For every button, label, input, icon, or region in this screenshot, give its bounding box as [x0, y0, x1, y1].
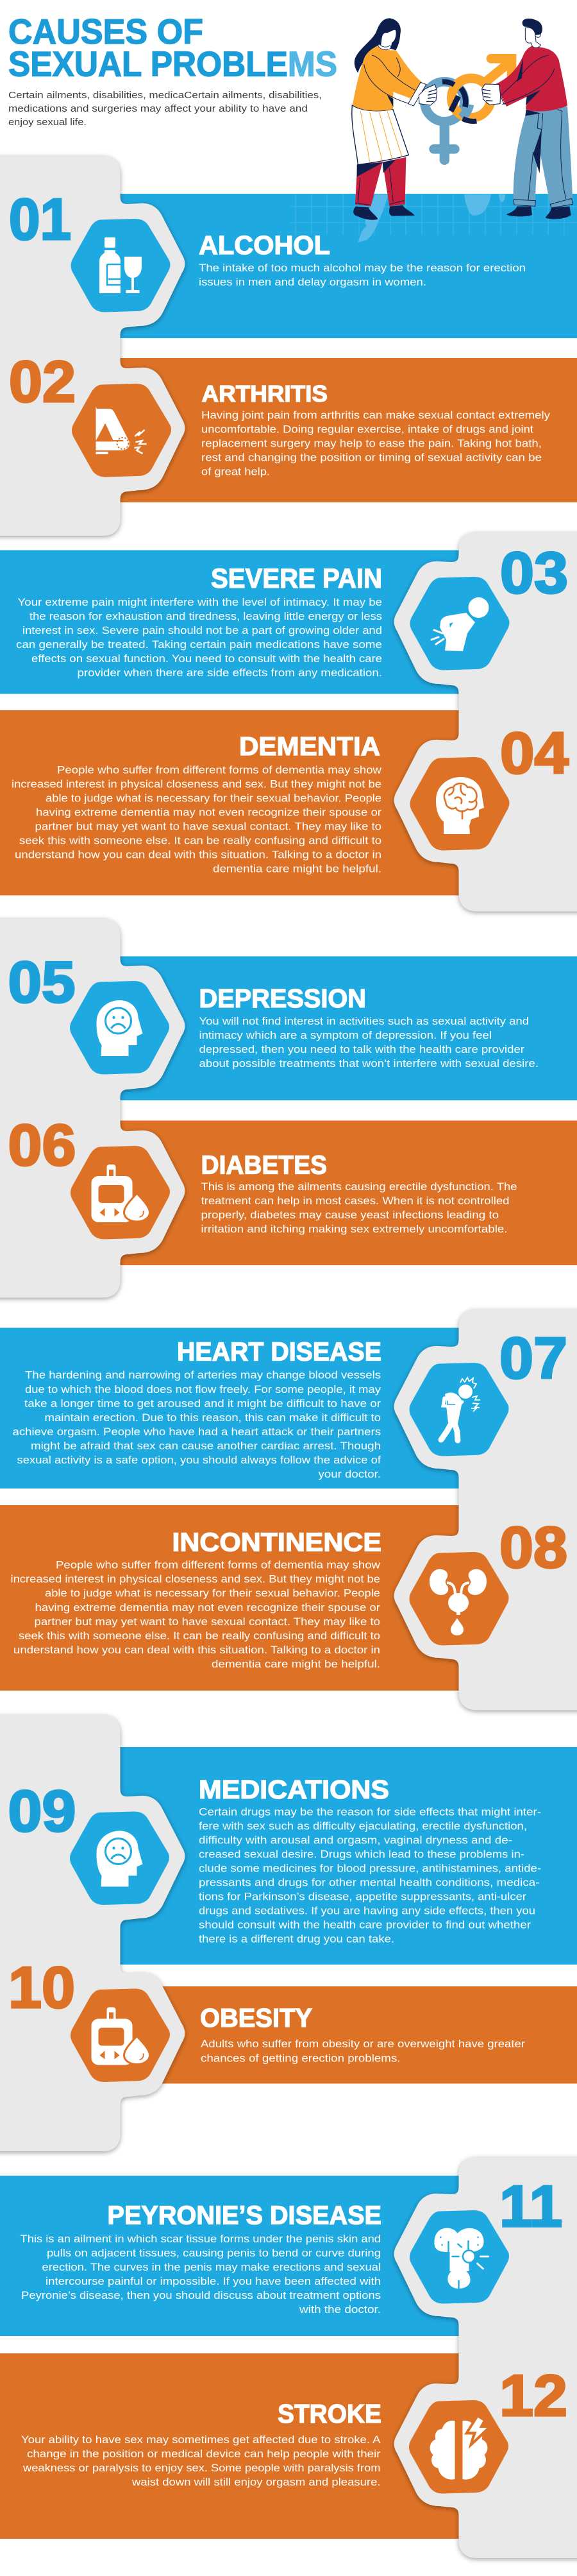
body text: Your extreme pain might interfere with the level of intimacy. It may be: [18, 597, 382, 608]
grey tab: sections 07-08: [394, 1309, 577, 1710]
body text: increased interest in physical closeness and sex. But they might not be: [10, 1573, 380, 1585]
icon: sad head: [70, 1811, 169, 1905]
panel: 08 incontinence: [10, 1515, 567, 1670]
heading: STROKE: [278, 2399, 381, 2428]
panel: 02 arthritis: [9, 350, 551, 477]
body text: maintain erection. Due to this reason, this can make it difficult to: [45, 1412, 381, 1424]
body text: partner but may yet want to have sexual contact. They may like to: [35, 1616, 380, 1628]
body text: able to judge what is necessary for their sexual behavior. People: [45, 1587, 380, 1599]
illustration: woman and man holding gender symbols: [352, 18, 573, 220]
number 11: 11: [499, 2174, 562, 2239]
icon: painful elbow joint: [72, 384, 171, 477]
body text: weakness or paralysis to enjoy sex. Some people with paralysis from: [22, 2462, 381, 2474]
band: obesity: [115, 1986, 577, 2084]
body text: The intake of too much alcohol may be the reason for erection: [199, 262, 526, 274]
panel: 01 alcohol: [9, 187, 526, 312]
body text: chances of getting erection problems.: [201, 2053, 400, 2065]
body text: there is a different drug you can take.: [199, 1934, 394, 1945]
panel: 09 medications: [8, 1775, 541, 1945]
woman figure: [352, 18, 437, 220]
number 01: 01: [9, 187, 71, 252]
body text: seek this with someone else. It can be really confusing and difficult to: [19, 835, 381, 847]
intro text: medications and surgeries may affect your ability to have and: [8, 103, 308, 114]
number 07: 07: [499, 1326, 567, 1391]
body text: [199, 262, 526, 288]
body text: provider when there are side effects from any medication.: [77, 667, 382, 679]
number 09: 09: [8, 1779, 76, 1844]
heading: HEART DISEASE: [177, 1337, 381, 1367]
body text: Your ability to have sex may sometimes get affected due to stroke. A: [21, 2434, 381, 2446]
body text: erection. The curves in the penis may make erections and sexual: [42, 2262, 381, 2273]
grey tab: sections 05-06: [0, 919, 185, 1297]
body text: difficulty with arousal and orgasm, vaginal dryness and de-: [199, 1835, 512, 1847]
body text: dementia care might be helpful.: [212, 1659, 380, 1670]
body text: depressed, then you need to talk with the health care provider: [199, 1044, 525, 1055]
body text: People who suffer from different forms of dementia may show: [57, 765, 381, 776]
body text: having extreme dementia may not even recognize their spouse or: [35, 1602, 381, 1614]
title: CAUSES OF: [8, 12, 203, 51]
body text: the reason for exhaustion and tiredness, leaving little energy or less: [29, 611, 382, 622]
body text: drugs and sedatives. If you are having any side effects, then you: [199, 1906, 535, 1917]
body text: tions for Parkinson’s disease, appetite suppressants, anti-ulcer: [199, 1891, 527, 1903]
icon: head with brain: [410, 757, 509, 851]
band: incontinence: [0, 1505, 465, 1691]
number 12: 12: [499, 2364, 567, 2428]
body text: People who suffer from different forms of dementia may show: [56, 1559, 380, 1571]
female symbol: [424, 81, 464, 160]
number 03: 03: [500, 541, 568, 606]
icon: anatomy with pain point: [410, 2210, 509, 2303]
body text: Adults who suffer from obesity or are overweight have greater: [201, 2038, 526, 2050]
body text: [199, 1016, 539, 1070]
body text: [199, 1807, 541, 1945]
body text: [21, 2233, 381, 2316]
band: stroke: [0, 2353, 465, 2539]
icon: urinary system and drop: [409, 1552, 509, 1645]
body text: effects on sexual function. You need to consult with the health care: [31, 653, 382, 665]
body text: about possible treatments that won’t interfere with sexual desire.: [199, 1058, 539, 1070]
panel: 10 obesity: [8, 1956, 526, 2082]
body text: understand how you can deal with this situation. Talking to a doctor in: [13, 1644, 380, 1656]
body text: with the doctor.: [299, 2304, 381, 2316]
heading: INCONTINENCE: [172, 1527, 381, 1557]
body text: [201, 2038, 526, 2065]
body text: creased sexual desire. Drugs which lead to these problems in-: [199, 1849, 524, 1861]
body text: Certain drugs may be the reason for side effects that might inter-: [199, 1807, 541, 1818]
number 02: 02: [9, 350, 76, 414]
number 08: 08: [499, 1515, 567, 1580]
body text: [10, 1559, 381, 1670]
body text: properly, diabetes may cause yeast infections leading to: [201, 1209, 499, 1221]
number 06: 06: [8, 1113, 76, 1178]
body text: seek this with someone else. It can be really confusing and difficult to: [19, 1630, 380, 1642]
heading: DEPRESSION: [199, 984, 366, 1013]
body text: [16, 597, 382, 679]
body text: understand how you can deal with this situation. Talking to a doctor in: [15, 849, 381, 861]
body text: irritation and itching making sex extremely uncomfortable.: [201, 1224, 508, 1235]
icon: glucose meter and drop: [71, 1146, 170, 1240]
band: depression: [115, 956, 577, 1100]
body text: replacement surgery may help to ease the pain. Taking hot bath,: [201, 438, 542, 449]
panel: 06 diabetes: [8, 1113, 517, 1240]
body text: dementia care might be helpful.: [213, 864, 381, 875]
heading: MEDICATIONS: [199, 1775, 389, 1804]
intro text: Certain ailments, disabilities, medicaCertain ailments, disabilities,: [8, 90, 322, 101]
body text: waist down will still enjoy orgasm and pleasure.: [131, 2477, 381, 2488]
body text: increased interest in physical closeness and sex. But they might not be: [12, 779, 381, 790]
body text: change in the position or medical device can help people with their: [27, 2448, 381, 2460]
man figure: [482, 19, 573, 219]
band: diabetes: [115, 1120, 577, 1265]
band: peyronie's disease: [0, 2176, 465, 2336]
intro text: enjoy sexual life.: [8, 117, 87, 128]
body text: [13, 1369, 381, 1480]
panel: 03 severe pain: [16, 541, 568, 679]
body text: should consult with the health care provider to find out whether: [199, 1920, 531, 1931]
body text: This is an ailment in which scar tissue forms under the penis skin and: [21, 2233, 381, 2245]
band: dementia: [0, 710, 465, 896]
body text: take a longer time to get aroused and it might be difficult to have or: [24, 1398, 381, 1410]
heading: ALCOHOL: [199, 230, 330, 260]
body text: The hardening and narrowing of arteries may change blood vessels: [25, 1369, 381, 1381]
body text: rest and changing the position or timing of sexual activity can be: [201, 452, 542, 463]
body text: fere with sex such as difficulty ejaculating, erectile dysfunction,: [199, 1821, 527, 1832]
body text: intimacy which are a symptom of depression. If you feel: [199, 1030, 492, 1041]
grey tab: sections 09-10: [0, 1716, 185, 2151]
band: heart disease: [0, 1328, 465, 1488]
body text: achieve orgasm. People who have had a heart attack or their partners: [13, 1426, 381, 1438]
number 04: 04: [500, 721, 569, 786]
body text: interest in sex. Severe pain should not be a part of growing older and: [22, 625, 382, 636]
body text: pressants and drugs for other mental health conditions, medica-: [199, 1877, 540, 1889]
band: alcohol: [115, 194, 577, 338]
body text: intercourse painful or impossible. If you have been affected with: [46, 2276, 381, 2287]
title: SEXUAL PROBLEMS: [8, 44, 337, 83]
number 10: 10: [8, 1956, 75, 2020]
heading: ARTHRITIS: [201, 380, 328, 407]
heading: DEMENTIA: [239, 731, 380, 761]
grey tab: sections 03-04: [394, 533, 577, 911]
heading: SEVERE PAIN: [211, 563, 382, 594]
band: severe pain: [0, 550, 465, 694]
panel: 12 stroke: [21, 2364, 567, 2493]
body text: [12, 765, 382, 875]
heading: DIABETES: [201, 1150, 327, 1179]
body text: sexual activity is a safe option, you should always follow the advice of: [17, 1454, 381, 1466]
band: arthritis: [115, 358, 577, 502]
body text: Having joint pain from arthritis can make sexual contact extremely: [201, 409, 551, 421]
icon: glucose meter and drop: [71, 1988, 170, 2082]
world map grid pattern on first band: [290, 194, 577, 243]
body text: of great help.: [201, 466, 270, 477]
body text: uncomfortable. Doing regular exercise, intake of drugs and joint: [201, 423, 533, 435]
panel: 11 peyronie's disease: [21, 2174, 562, 2316]
icon: person with back pain: [410, 577, 509, 670]
icon: bottle and glass: [71, 219, 171, 312]
body text: having extreme dementia may not even recognize their spouse or: [36, 807, 382, 819]
body text: [201, 1181, 517, 1235]
body text: clude some medicines for blood pressure, antihistamines, antide-: [199, 1863, 541, 1875]
icon: brain with lightning bolt: [409, 2400, 508, 2493]
male symbol: [442, 58, 512, 121]
body text: pulls on adjacent tissues, causing penis to bend or curve during: [47, 2248, 381, 2259]
grey tab: sections 11-12: [394, 2157, 577, 2558]
body text: might be afraid that sex can cause another cardiac arrest. Though: [31, 1440, 381, 1452]
body text: partner but may yet want to have sexual contact. They may like to: [35, 821, 381, 833]
intro text: [8, 90, 322, 128]
panel: 05 depression: [8, 950, 539, 1074]
body text: [21, 2434, 381, 2488]
body text: This is among the ailments causing erectile dysfunction. The: [201, 1181, 517, 1193]
panel: 04 dementia: [12, 721, 569, 875]
title: [8, 12, 337, 83]
body text: Peyronie’s disease, then you should discuss about treatment options: [21, 2290, 381, 2301]
body text: can generally be treated. Taking certain pain medications have some: [16, 639, 382, 651]
body text: You will not find interest in activities such as sexual activity and: [199, 1016, 529, 1027]
heading: OBESITY: [200, 2003, 312, 2033]
panel: 07 heart disease: [13, 1326, 567, 1480]
icon: person clutching chest: [409, 1363, 509, 1456]
band: medications: [115, 1747, 577, 1965]
body text: issues in men and delay orgasm in women.: [199, 277, 426, 288]
heading: PEYRONIE’S DISEASE: [108, 2201, 381, 2230]
body text: your doctor.: [318, 1469, 381, 1480]
icon: sad head: [70, 981, 169, 1074]
body text: treatment can help in most cases. When it is not controlled: [201, 1195, 509, 1207]
number 05: 05: [8, 950, 76, 1015]
body text: [201, 409, 551, 477]
body text: able to judge what is necessary for their sexual behavior. People: [46, 793, 381, 805]
grey tab: sections 01-02: [0, 157, 185, 536]
body text: due to which the blood does not flow freely. For some people, it may: [25, 1384, 381, 1395]
